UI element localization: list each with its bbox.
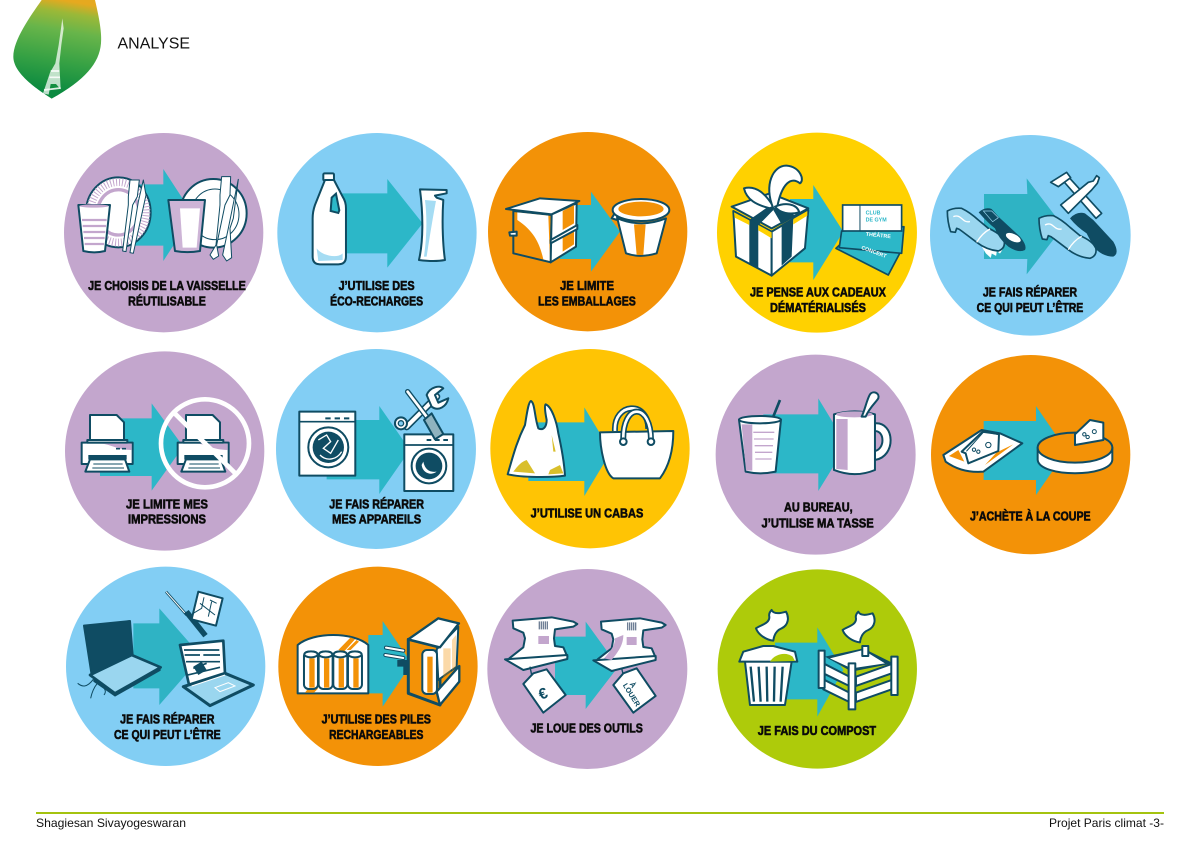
panel: piles rechargeables: RECHARGEABLES	[329, 727, 424, 742]
icon: repaired washing machine	[404, 434, 453, 491]
panel: cabas: J’UTILISE UN CABAS	[531, 505, 643, 520]
panel: appareils	[276, 349, 476, 549]
icon: disposable cup with stirrer	[739, 400, 781, 473]
icon: printer	[82, 415, 133, 472]
icon: tote bag	[600, 408, 673, 478]
icon: tickets	[836, 205, 904, 275]
heading: ANALYSE: ANALYSE	[118, 35, 190, 52]
footer: project and page number: Projet Paris climat -3-	[1049, 816, 1164, 830]
panel: piles rechargeables: J’UTILISE DES PILES	[322, 711, 431, 726]
panel: cadeaux dématérialisés: DÉMATÉRIALISÉS	[770, 300, 866, 315]
panel: appareils: JE FAIS RÉPARER	[329, 496, 424, 511]
icon: broken washing machine	[299, 412, 355, 476]
panel: emballages: JE LIMITE	[560, 278, 614, 293]
logo: leaf with Eiffel tower	[13, 0, 101, 99]
icon: compost crate	[819, 646, 898, 709]
panel: achat à la coupe: J’ACHÈTE À LA COUPE	[970, 508, 1091, 523]
icon: sander with rental tag: À	[628, 680, 638, 690]
icon: trash can	[739, 646, 797, 705]
icon: tickets: CLUB	[866, 211, 881, 217]
panel: tasse au bureau	[716, 355, 916, 555]
panel: emballages: LES EMBALLAGES	[538, 293, 636, 308]
icon: stacked packaging	[506, 198, 579, 262]
footer rule	[36, 812, 1164, 814]
panel: réparer ordinateur	[66, 567, 265, 766]
panel: impressions: IMPRESSIONS	[128, 512, 206, 527]
icon: cheese wheel	[1038, 420, 1112, 473]
icon: cheese in tray	[943, 430, 1022, 472]
icon: battery charger	[385, 618, 459, 705]
panel: réparer ordinateur: JE FAIS RÉPARER	[120, 711, 215, 726]
panel: impressions	[65, 351, 264, 551]
icon: disposable plate, cup and cutlery	[78, 177, 151, 253]
icon: sander with price tag: €	[536, 685, 551, 704]
icon: battery pack	[298, 635, 368, 693]
panel: réparer ordinateur: CE QUI PEUT L’ÊTRE	[114, 727, 221, 742]
panel: compost	[718, 569, 917, 769]
icon: tickets: THÉÂTRE	[865, 230, 892, 240]
icon: refill pouch	[419, 189, 447, 261]
icon: worn shoes	[947, 208, 1026, 258]
icon: sander with rental tag	[593, 618, 666, 713]
footer: author: Shagiesan Sivayogeswaran	[36, 816, 186, 830]
icon: reusable tub	[612, 199, 669, 256]
panel: location d'outils	[487, 569, 687, 769]
icon: tickets: DE GYM	[866, 217, 887, 223]
panel: tasse au bureau: AU BUREAU,	[784, 500, 853, 515]
panel: vaisselle réutilisable: JE CHOISIS DE LA VAISSELLE	[88, 278, 246, 293]
icon: reusable plate, glass and cutlery	[168, 177, 247, 261]
panel: impressions: JE LIMITE MES	[126, 496, 208, 511]
panel: location d'outils: JE LOUE DES OUTILS	[530, 720, 643, 735]
icon: plastic bag	[508, 401, 565, 477]
icon: sander with rental tag: LOUER	[621, 682, 643, 709]
icon: apple core over bin	[756, 610, 788, 641]
icon: sander with price tag	[505, 617, 577, 713]
panel: appareils: MES APPAREILS	[332, 512, 421, 527]
icon: gift box	[732, 166, 808, 276]
icon: repaired laptop	[180, 641, 253, 706]
panel: cabas	[490, 349, 690, 548]
icon: apple core over crate	[843, 612, 875, 642]
icon: wrench and screwdriver	[395, 387, 448, 439]
icon: screwdriver and circuit board	[166, 592, 223, 637]
panel: piles rechargeables	[278, 567, 478, 766]
panel: emballages	[488, 132, 687, 331]
panel: achat à la coupe	[931, 355, 1130, 554]
icon: mug with spoon	[834, 392, 891, 474]
panel: compost: JE FAIS DU COMPOST	[758, 723, 876, 738]
icon: broken laptop	[78, 621, 161, 698]
icon: hammer and glue tube	[1051, 172, 1102, 218]
panel: éco-recharges	[277, 133, 477, 332]
panel: cadeaux dématérialisés	[717, 133, 917, 333]
panel: réparer chaussures: JE FAIS RÉPARER	[983, 285, 1077, 300]
panel: réparer chaussures	[930, 135, 1131, 336]
icon: bottle	[313, 173, 346, 264]
icon: crossed-out printer	[161, 399, 249, 487]
panel: éco-recharges: ÉCO-RECHARGES	[330, 293, 423, 308]
icon: tickets: CONCERT	[860, 245, 888, 260]
panel: vaisselle réutilisable: RÉUTILISABLE	[128, 293, 206, 308]
panel: réparer chaussures: CE QUI PEUT L’ÊTRE	[977, 300, 1083, 315]
panel: vaisselle réutilisable	[64, 133, 263, 332]
panel: tasse au bureau: J’UTILISE MA TASSE	[761, 515, 874, 530]
panel: éco-recharges: J’UTILISE DES	[339, 278, 415, 293]
panel: cadeaux dématérialisés: JE PENSE AUX CADEAUX	[750, 285, 886, 300]
icon: repaired shoes	[1039, 213, 1117, 258]
